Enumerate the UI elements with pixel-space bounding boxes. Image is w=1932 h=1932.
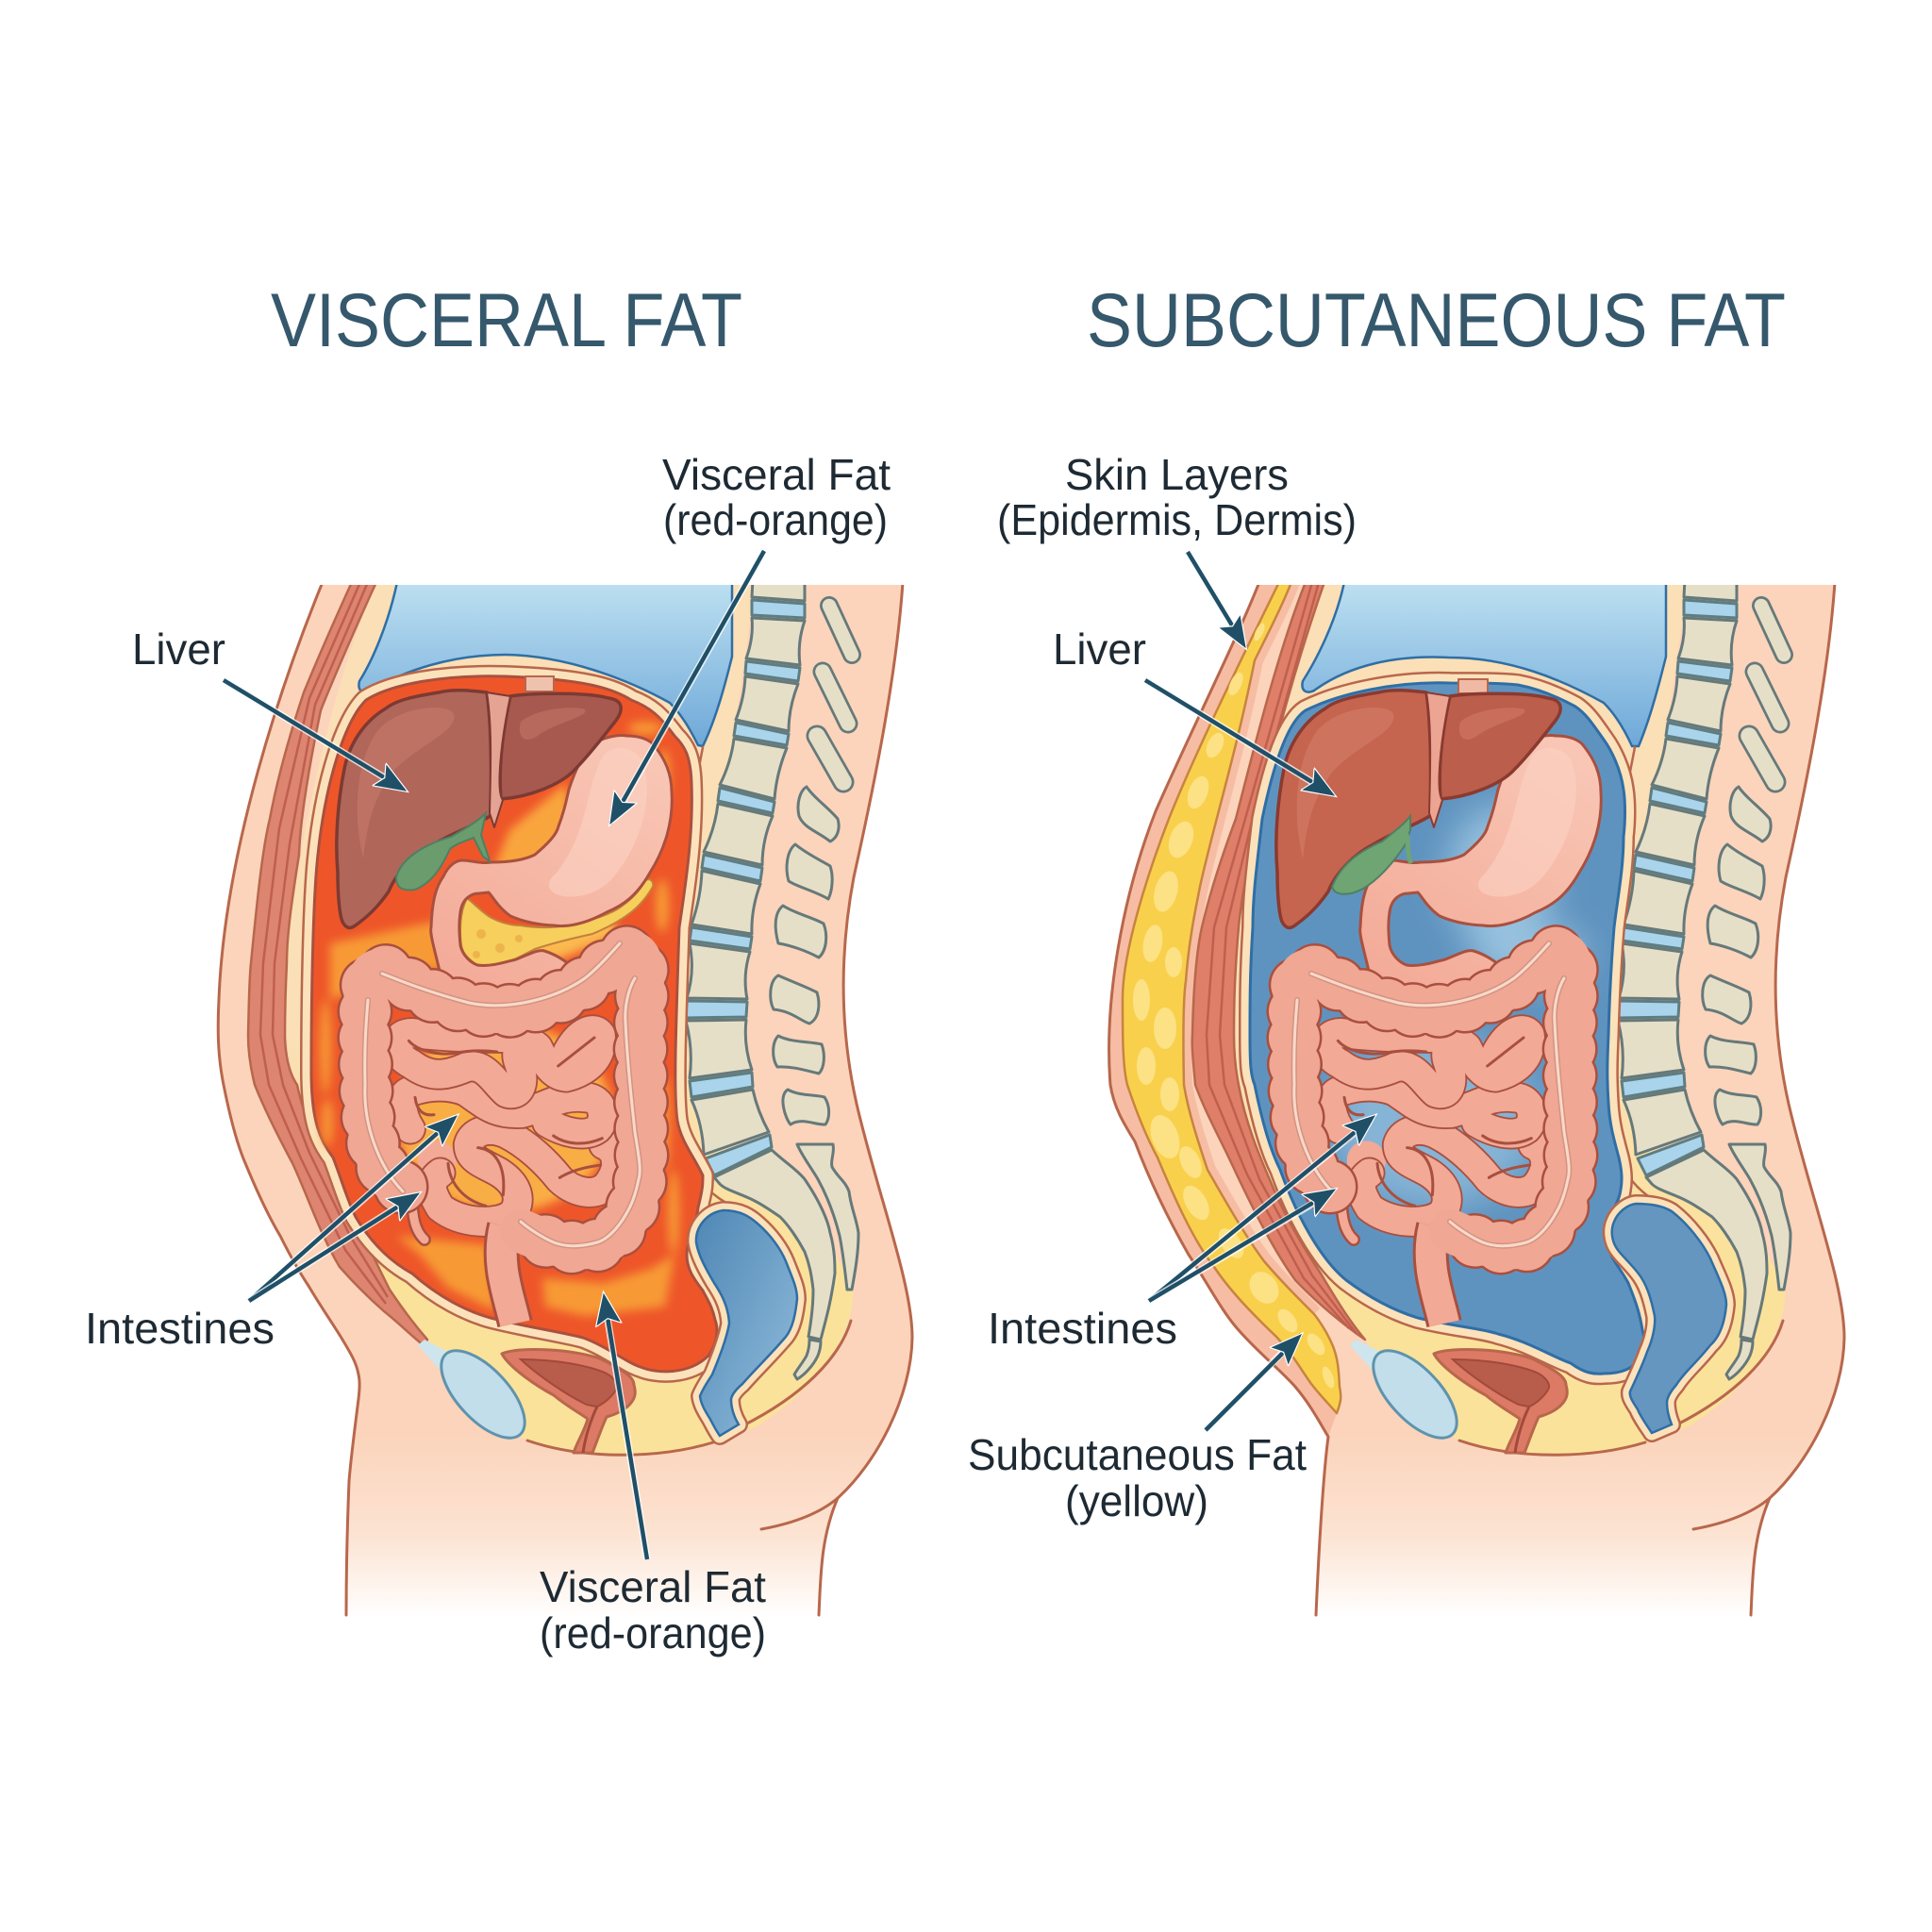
label: skin layers: (Epidermis, Dermis) bbox=[997, 495, 1357, 544]
arrow: liver left bbox=[224, 680, 406, 791]
label: visceral fat upper: Visceral Fat bbox=[662, 450, 891, 499]
peritoneum band bbox=[1250, 683, 1644, 1374]
rectum bbox=[1612, 1204, 1726, 1433]
spine bbox=[675, 579, 858, 1379]
falciform strip bbox=[1458, 679, 1488, 693]
stomach bbox=[1360, 735, 1601, 995]
abdominal cavity without visceral fat bbox=[1250, 683, 1644, 1374]
lung base bbox=[1302, 582, 1666, 746]
title: visceral fat: VISCERAL FAT bbox=[271, 278, 742, 363]
body skin bbox=[1192, 585, 1845, 1617]
peritoneum band bbox=[311, 676, 717, 1372]
pelvic outline bbox=[527, 1321, 851, 1455]
label: visceral fat lower: Visceral Fat bbox=[540, 1562, 766, 1611]
visceral fat red-orange bbox=[311, 676, 717, 1372]
label: skin layers: Skin Layers bbox=[1065, 450, 1289, 499]
label: intestines right: Intestines bbox=[988, 1304, 1177, 1353]
arrow: visceral fat lower bbox=[604, 1294, 647, 1559]
skin dermis band bbox=[1109, 582, 1337, 1615]
stomach bbox=[431, 735, 672, 995]
falciform strip bbox=[525, 676, 554, 691]
arrow: intestines right upper bbox=[1149, 1116, 1374, 1301]
liver bbox=[337, 691, 621, 927]
label: skin layers bbox=[997, 450, 1357, 544]
liver bbox=[1276, 691, 1560, 927]
label: subcutaneous fat: Subcutaneous Fat bbox=[968, 1430, 1307, 1479]
arrow: intestines right lower bbox=[1149, 1190, 1335, 1301]
pelvic outline bbox=[1459, 1321, 1783, 1455]
peritoneal and pelvic fat layer bbox=[1233, 582, 1785, 1455]
rectum bbox=[696, 1210, 797, 1436]
peritoneal and pelvic fat layer bbox=[285, 582, 853, 1455]
arrow: intestines left lower bbox=[249, 1193, 419, 1301]
arrow: subcutaneous fat bbox=[1206, 1335, 1301, 1430]
bladder and pubic bone bbox=[418, 1337, 635, 1453]
label: subcutaneous fat: (yellow) bbox=[1065, 1476, 1208, 1525]
panel: subcutaneous fat cross-section bbox=[1109, 579, 1844, 1618]
subcutaneous fat yellow bbox=[1123, 582, 1341, 1413]
label: visceral fat upper: (red-orange) bbox=[663, 495, 888, 544]
label: liver right: Liver bbox=[1053, 625, 1146, 674]
arrow: liver right bbox=[1145, 680, 1334, 795]
label: visceral fat upper bbox=[662, 450, 891, 544]
panel: visceral fat cross-section bbox=[218, 579, 912, 1618]
label: visceral fat lower: (red-orange) bbox=[540, 1608, 766, 1657]
arrow: visceral fat upper bbox=[610, 551, 764, 824]
lung base bbox=[358, 582, 732, 746]
bile duct bbox=[1404, 830, 1411, 863]
arrow: intestines left upper bbox=[249, 1116, 457, 1301]
label: intestines left: Intestines bbox=[85, 1304, 275, 1353]
bladder and pubic bone bbox=[1350, 1337, 1567, 1453]
body skin bbox=[218, 582, 912, 1618]
pancreas bbox=[460, 879, 653, 967]
intestines bbox=[365, 943, 642, 1324]
gallbladder bbox=[1332, 816, 1410, 894]
label: liver left: Liver bbox=[132, 625, 225, 674]
arrow: skin layers bbox=[1188, 552, 1245, 647]
intestines bbox=[1294, 943, 1572, 1324]
label: subcutaneous fat bbox=[968, 1430, 1307, 1525]
label: visceral fat lower bbox=[540, 1562, 766, 1657]
abdominal wall muscle bbox=[248, 582, 427, 1346]
gallbladder bbox=[396, 813, 490, 890]
title: subcutaneous fat: SUBCUTANEOUS FAT bbox=[1087, 278, 1786, 363]
spine bbox=[1607, 579, 1790, 1379]
abdominal wall muscle bbox=[1192, 582, 1365, 1340]
